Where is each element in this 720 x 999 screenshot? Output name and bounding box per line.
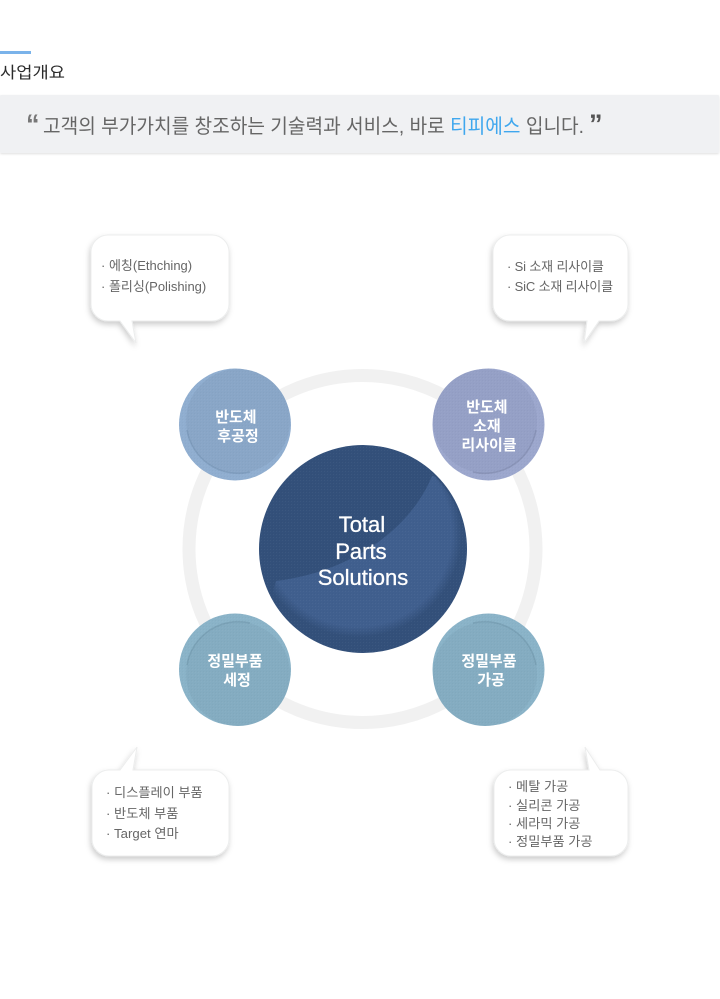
callout text: · 폴리싱(Polishing)	[101, 279, 206, 294]
callout text: · 에칭(Ethching)	[101, 258, 192, 273]
callout text: · SiC 소재 리사이클	[507, 279, 613, 294]
node: semiconductor back-end process	[179, 368, 291, 480]
center label: Total	[339, 512, 385, 537]
node: precision parts cleaning	[179, 614, 291, 726]
node label: 반도체	[215, 409, 257, 426]
node label: 정밀부품	[461, 653, 517, 670]
heading accent bar	[0, 51, 31, 54]
callout: parts cleaning	[92, 747, 229, 856]
callout text: · 세라믹 가공	[508, 816, 580, 831]
closing quote mark: ”	[589, 109, 602, 139]
callout text: · 메탈 가공	[508, 779, 568, 794]
callout text: · Target 연마	[106, 826, 179, 841]
node label: 세정	[223, 672, 251, 689]
center circle: Total Parts Solutions	[254, 429, 467, 653]
callout text: · 디스플레이 부품	[106, 785, 203, 800]
callout: back-end process	[91, 235, 229, 343]
callout text: · 실리콘 가공	[508, 798, 580, 813]
callout: material recycling	[493, 235, 628, 343]
center label: Parts	[335, 539, 387, 564]
heading: 사업개요	[0, 64, 65, 82]
ring connecting circles	[189, 376, 536, 722]
opening quote mark: “	[26, 109, 40, 139]
node label: 후공정	[217, 428, 259, 445]
callout: parts machining	[494, 747, 628, 856]
node label: 리사이클	[461, 437, 517, 454]
callout text: · Si 소재 리사이클	[507, 259, 604, 274]
node label: 소재	[473, 418, 501, 435]
quote banner	[0, 95, 719, 153]
callout text: · 정밀부품 가공	[508, 834, 593, 849]
node label: 반도체	[466, 399, 508, 416]
node label: 정밀부품	[207, 653, 263, 670]
node: semiconductor material recycling	[432, 368, 544, 480]
node label: 가공	[477, 672, 505, 689]
quote text: 고객의 부가가치를 창조하는 기술력과 서비스, 바로 티피에스 입니다.	[43, 115, 584, 138]
node: precision parts machining	[432, 614, 544, 726]
center label: Solutions	[318, 565, 408, 590]
callout text: · 반도체 부품	[106, 806, 178, 821]
